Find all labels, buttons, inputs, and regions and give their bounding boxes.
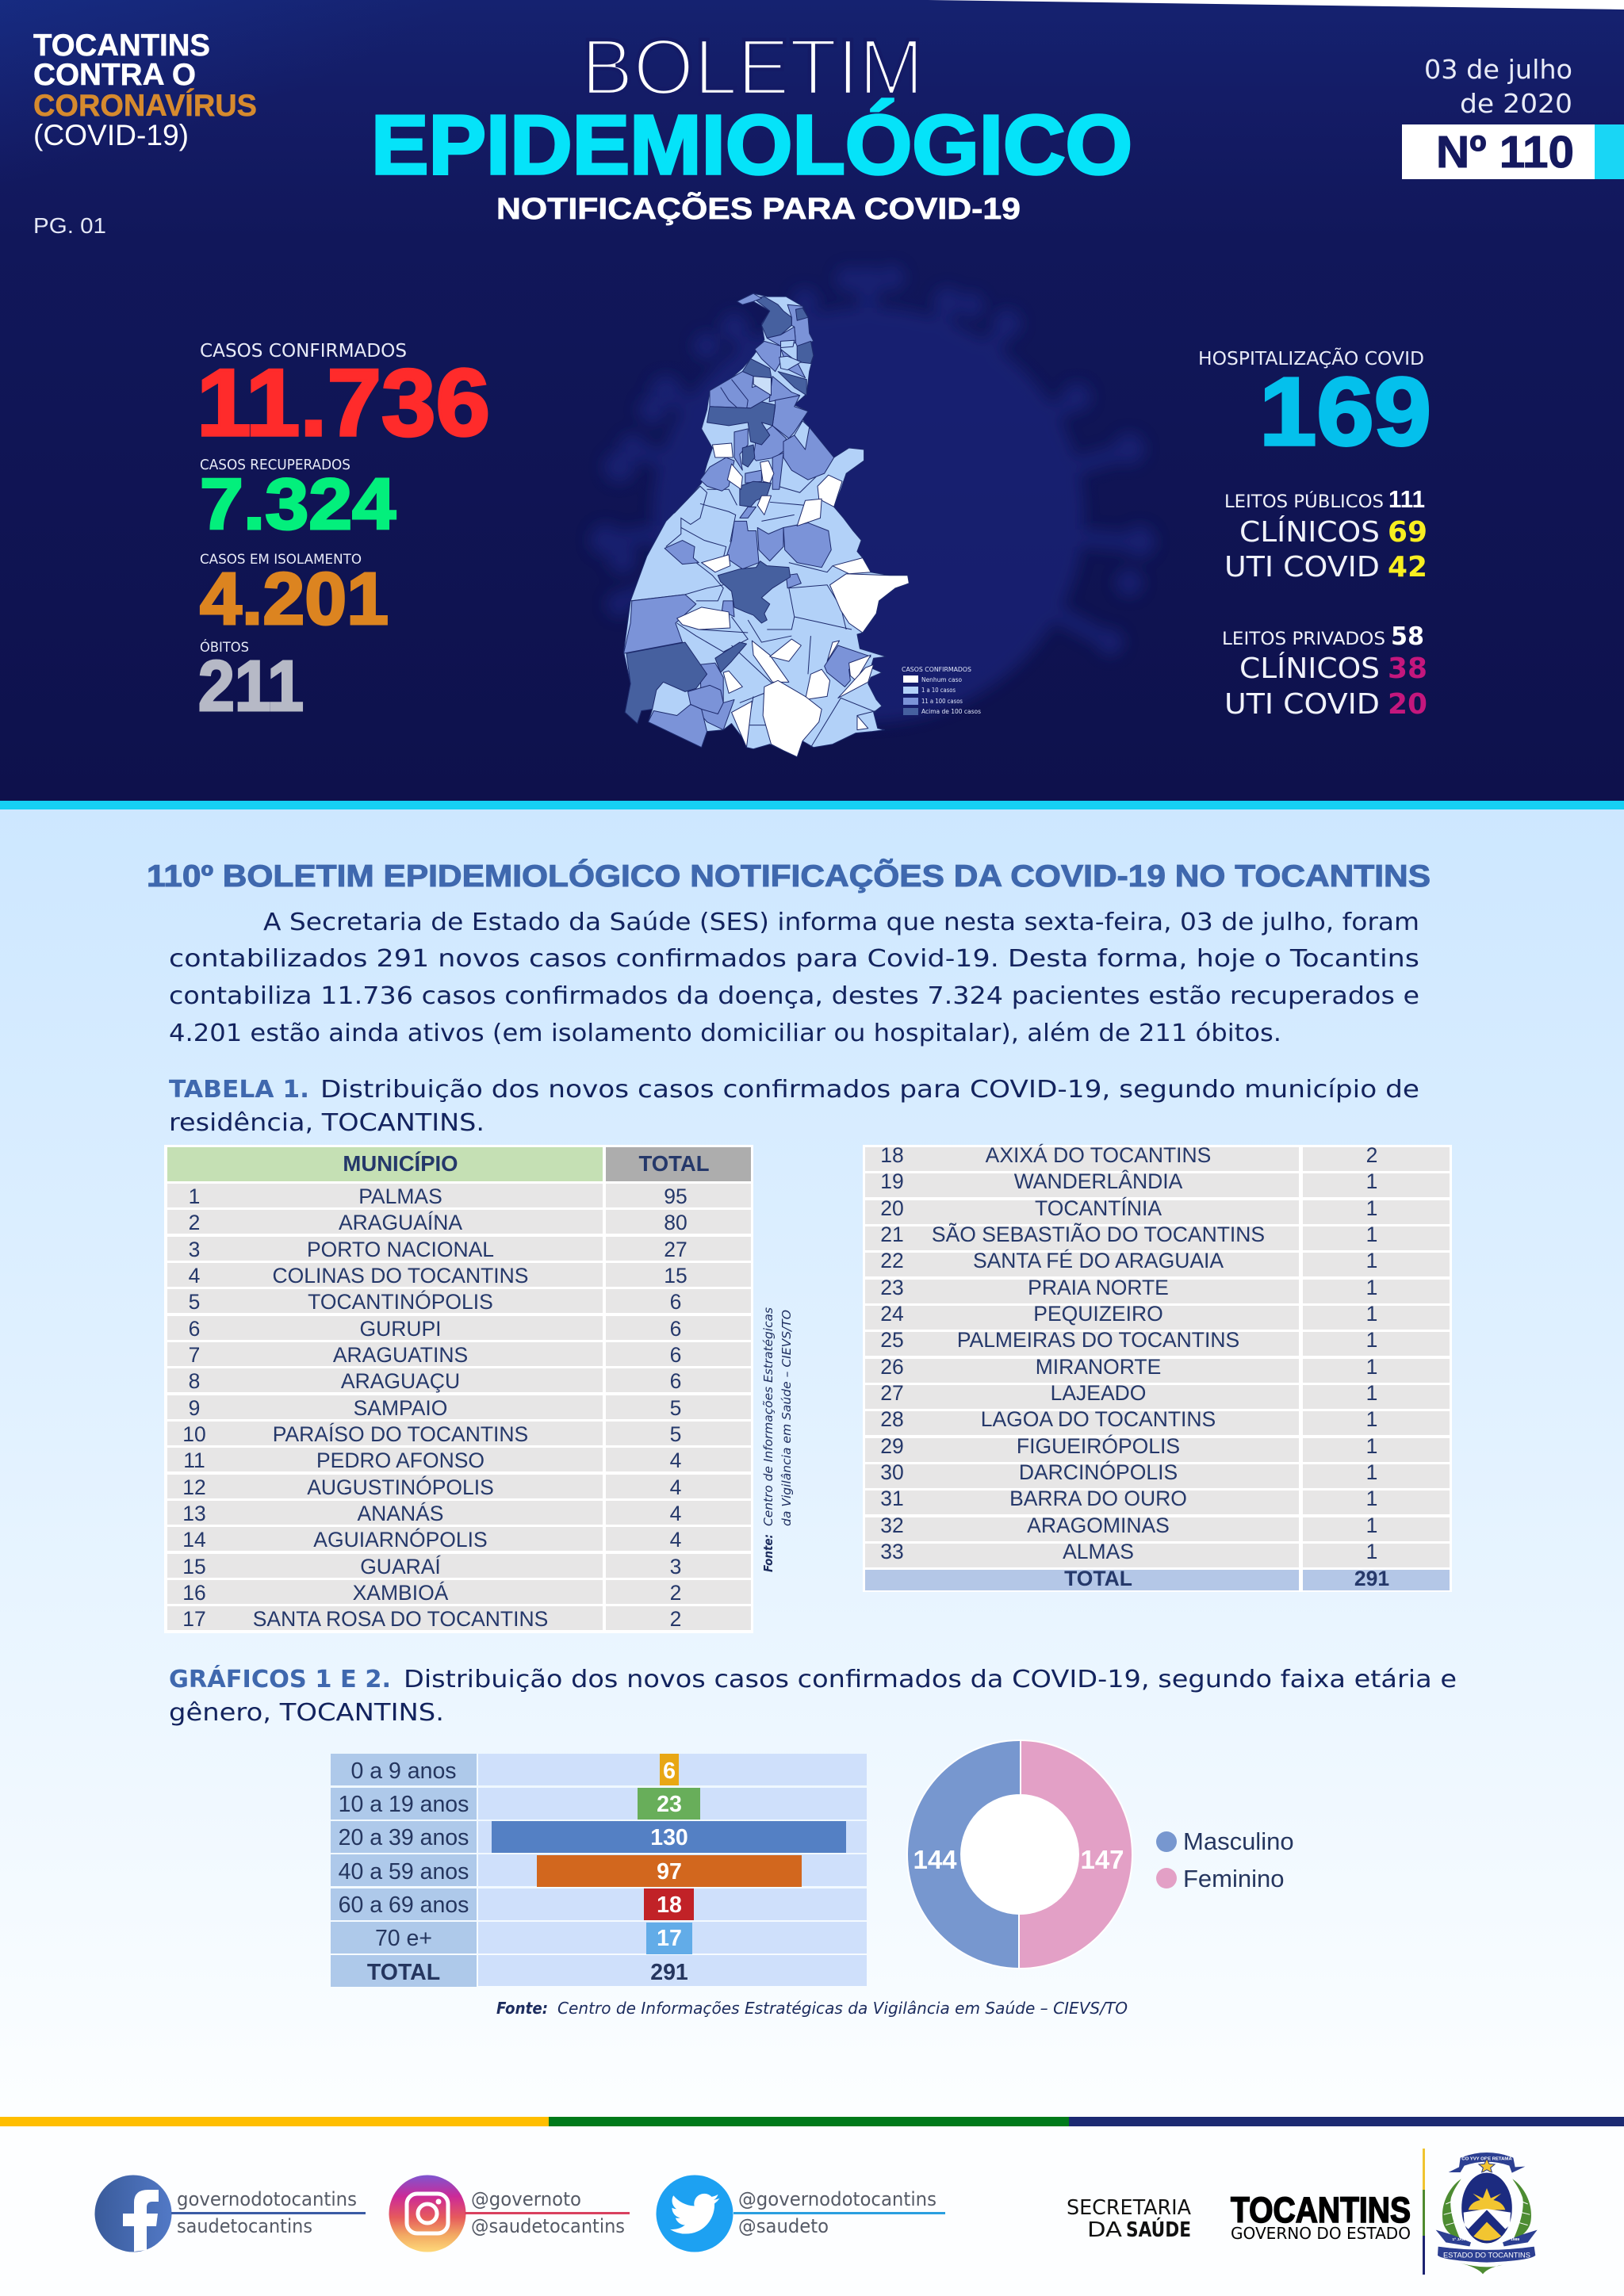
date: de 2020 (1460, 88, 1572, 119)
table: municípios 18 a 33: 20 (880, 1196, 904, 1220)
chart: cases by age group: 130 (650, 1825, 688, 1850)
heading: Tocantins contra o coronavírus: CORONAVÍRUS (33, 88, 257, 123)
table: municípios 1 a 17: 17 (182, 1607, 206, 1631)
table: municípios 18 a 33: 33 (880, 1540, 904, 1563)
table: municípios 18 a 33: PEQUIZEIRO (1033, 1302, 1163, 1326)
table: municípios 1 a 17: TOTAL (638, 1151, 710, 1176)
table: municípios 1 a 17: 4 (670, 1448, 681, 1472)
table 1 caption (169, 1076, 1419, 1137)
icon: state coat of arms: CO YVY ORE RETAMA (1461, 2157, 1512, 2162)
table: municípios 18 a 33: 24 (880, 1302, 904, 1326)
table: municípios 1 a 17: 2 (670, 1607, 681, 1631)
page number: PG. 01 (33, 213, 106, 238)
table: municípios 1 a 17: 6 (670, 1290, 681, 1314)
map of Tocantins by confirmed cases (623, 293, 909, 757)
map legend: CASOS CONFIRMADOS (902, 666, 971, 673)
social: instagram: @governoto (471, 2188, 581, 2210)
table: municípios 18 a 33: MIRANORTE (1036, 1355, 1161, 1379)
table: municípios 1 a 17: COLINAS DO TOCANTINS (273, 1264, 528, 1288)
chart: cases by age group: 97 (657, 1859, 682, 1885)
stat: leitos privados: LEITOS PRIVADOS (1222, 629, 1385, 649)
table: municípios 1 a 17 (164, 1145, 753, 1633)
table: municípios 1 a 17: 4 (189, 1264, 200, 1288)
stat: leitos públicos: 111 (1388, 485, 1425, 513)
intro paragraph: 4.201 estão ainda ativos (em isolamento domiciliar ou hospitalar), além de 211 óbitos. (169, 1020, 1281, 1047)
stat: leitos públicos: 69 (1388, 516, 1427, 549)
table: municípios 1 a 17: ANANÁS (358, 1502, 443, 1525)
chart: cases by age group: 23 (657, 1792, 682, 1817)
source note: Centro de Informações Estratégicas da Vigilância em Saúde – CIEVS/TO (557, 1999, 1128, 2018)
map legend: 11 a 100 casos (921, 698, 963, 705)
table: municípios 1 a 17: PEDRO AFONSO (316, 1448, 485, 1472)
table: municípios 18 a 33: 18 (880, 1143, 904, 1167)
table: municípios 18 a 33: 1 (1366, 1540, 1377, 1563)
heading: Tocantins contra o coronavírus: (COVID-19) (33, 119, 189, 151)
subtitle: NOTIFICAÇÕES PARA COVID-19 (496, 191, 1021, 226)
icon: coronavirus backdrop (590, 265, 1155, 723)
social: twitter: @saudeto (738, 2215, 829, 2237)
stat: leitos privados (1222, 622, 1427, 721)
table: municípios 18 a 33: WANDERLÂNDIA (1014, 1169, 1183, 1193)
chart: cases by age group: 17 (657, 1926, 682, 1951)
table: municípios 1 a 17: 3 (670, 1555, 681, 1578)
social: twitter (657, 2175, 945, 2252)
stat: casos em isolamento: CASOS EM ISOLAMENTO (200, 552, 362, 568)
table: municípios 18 a 33: 1 (1366, 1513, 1377, 1537)
table: municípios 18 a 33: 1 (1366, 1223, 1377, 1246)
stat: leitos privados: 38 (1388, 652, 1427, 685)
chart: cases by age group: 0 a 9 anos (350, 1758, 457, 1784)
table: municípios 1 a 17: SANTA ROSA DO TOCANTINS (253, 1607, 548, 1631)
stat: leitos públicos: CLÍNICOS (1239, 515, 1380, 549)
table: municípios 1 a 17: 4 (670, 1475, 681, 1499)
table: municípios 18 a 33: PALMEIRAS DO TOCANTINS (957, 1328, 1239, 1352)
section heading: 110º BOLETIM EPIDEMIOLÓGICO NOTIFICAÇÕES DA COVID-19 NO TOCANTINS (147, 859, 1431, 894)
table: municípios 18 a 33: 1 (1366, 1169, 1377, 1193)
table: municípios 18 a 33: FIGUEIRÓPOLIS (1017, 1434, 1180, 1458)
logo: Secretaria da Saúde: SAÚDE (1126, 2217, 1191, 2242)
heading: Tocantins contra o coronavírus: CONTRA O (33, 58, 196, 92)
charts caption (169, 1665, 1457, 1727)
edition badge: Nº 110 (1436, 127, 1574, 178)
logo: Tocantins governo do estado: TOCANTINS (1231, 2190, 1411, 2230)
table: municípios 18 a 33: 31 (880, 1487, 904, 1510)
chart: cases by age group: 60 a 69 anos (339, 1892, 469, 1918)
table: municípios 1 a 17: 6 (670, 1369, 681, 1393)
table: municípios 1 a 17: GUARAÍ (360, 1555, 441, 1578)
map legend: 1 a 10 casos (921, 687, 956, 694)
table: municípios 1 a 17: 15 (182, 1555, 206, 1578)
table: municípios 1 a 17: ARAGUAÇU (341, 1369, 460, 1393)
stat: leitos privados: CLÍNICOS (1239, 652, 1380, 685)
edition badge (1402, 124, 1624, 179)
table: municípios 18 a 33: ALMAS (1063, 1540, 1134, 1563)
table: municípios 18 a 33: LAGOA DO TOCANTINS (981, 1407, 1216, 1431)
stat: leitos públicos (1224, 485, 1427, 584)
chart: cases by age group: 10 a 19 anos (339, 1792, 469, 1817)
stat: casos confirmados: CASOS CONFIRMADOS (200, 341, 407, 362)
table: municípios 18 a 33: SANTA FÉ DO ARAGUAIA (973, 1249, 1224, 1272)
table: municípios 1 a 17: ARAGUATINS (333, 1343, 468, 1367)
social: instagram (389, 2175, 630, 2252)
panel: body background (0, 801, 1624, 2117)
stat: leitos privados: 20 (1388, 688, 1427, 721)
table: municípios 18 a 33: 21 (880, 1223, 904, 1246)
table: municípios 18 a 33: 25 (880, 1328, 904, 1352)
table: municípios 1 a 17: 6 (189, 1317, 200, 1341)
table: municípios 18 a 33: 1 (1366, 1196, 1377, 1220)
table: municípios 1 a 17: ARAGUAÍNA (339, 1211, 462, 1234)
table: municípios 1 a 17: 13 (182, 1502, 206, 1525)
logo: Tocantins governo do estado: GOVERNO DO ESTADO (1231, 2224, 1411, 2243)
chart: gender donut: 147 (1080, 1845, 1124, 1874)
table: municípios 1 a 17: 9 (189, 1396, 200, 1420)
table: municípios 1 a 17: PALMAS (358, 1184, 442, 1208)
table: municípios 1 a 17: TOCANTINÓPOLIS (308, 1290, 493, 1314)
table: municípios 18 a 33: 1 (1366, 1249, 1377, 1272)
heading: Tocantins contra o coronavírus: TOCANTINS (33, 29, 210, 63)
stat: leitos privados: 58 (1391, 622, 1424, 651)
panel: header background (0, 0, 1624, 801)
table: municípios 18 a 33: 2 (1366, 1143, 1377, 1167)
stat: hospitalização covid (1198, 347, 1431, 465)
table: municípios 18 a 33: 1 (1366, 1460, 1377, 1484)
table: municípios 18 a 33: 1 (1366, 1407, 1377, 1431)
charts caption: GRÁFICOS 1 E 2. (169, 1665, 391, 1693)
logo: Secretaria da Saúde: DA (1087, 2218, 1122, 2242)
table: municípios 18 a 33: 1 (1366, 1381, 1377, 1405)
table: municípios 1 a 17: MUNICÍPIO (343, 1151, 458, 1176)
table 1 caption: TABELA 1. (169, 1076, 309, 1104)
social: facebook: saudetocantins (177, 2215, 312, 2237)
intro paragraph: A Secretaria de Estado da Saúde (SES) informa que nesta sexta-feira, 03 de julho, foram (263, 909, 1419, 936)
table: municípios 18 a 33: 30 (880, 1460, 904, 1484)
title: Epidemiológico: EPIDEMIOLÓGICO (371, 98, 1132, 192)
table: municípios 1 a 17: SAMPAIO (354, 1396, 447, 1420)
stat: leitos públicos: UTI COVID (1224, 551, 1380, 584)
table: municípios 18 a 33: AXIXÁ DO TOCANTINS (986, 1143, 1211, 1167)
table 1 caption: residência, TOCANTINS. (169, 1109, 485, 1137)
table: municípios 1 a 17: 12 (182, 1475, 206, 1499)
table: municípios 1 a 17: 5 (670, 1396, 681, 1420)
table: municípios 1 a 17: 5 (189, 1290, 200, 1314)
table: municípios 1 a 17: PORTO NACIONAL (307, 1238, 494, 1261)
stat: óbitos: 211 (198, 647, 304, 726)
logo: Secretaria da Saúde: SECRETARIA (1067, 2196, 1191, 2220)
intro paragraph: contabilizados 291 novos casos confirmados para Covid-19. Desta forma, hoje o Tocantins (169, 945, 1419, 973)
table: municípios 18 a 33 (863, 1143, 1452, 1592)
table: municípios 18 a 33: ARAGOMINAS (1027, 1513, 1170, 1537)
table: municípios 18 a 33: 19 (880, 1169, 904, 1193)
stat: leitos privados: UTI COVID (1224, 688, 1380, 721)
intro paragraph: contabiliza 11.736 casos confirmados da doença, destes 7.324 pacientes estão recuperados e (169, 982, 1419, 1010)
table: municípios 18 a 33: 291 (1354, 1567, 1389, 1590)
table: municípios 1 a 17: 95 (664, 1184, 688, 1208)
table: municípios 1 a 17: AUGUSTINÓPOLIS (307, 1475, 494, 1499)
logo: Tocantins governo do estado (1231, 2190, 1411, 2243)
table: municípios 18 a 33: 1 (1366, 1328, 1377, 1352)
table: municípios 1 a 17: 14 (182, 1528, 206, 1552)
stat: hospitalização covid: HOSPITALIZAÇÃO COVID (1198, 347, 1424, 369)
table: municípios 1 a 17: 16 (182, 1581, 206, 1605)
stat: hospitalização covid: 169 (1259, 358, 1431, 465)
icon: state coat of arms: ESTADO DO TOCANTINS (1443, 2252, 1530, 2260)
table: municípios 18 a 33: 1 (1366, 1434, 1377, 1458)
map legend: Nenhum caso (921, 676, 962, 683)
chart: cases by age group: 18 (657, 1892, 682, 1918)
table: municípios 1 a 17: AGUIARNÓPOLIS (313, 1528, 488, 1552)
charts caption: Distribuição dos novos casos confirmados da COVID-19, segundo faixa etária e (404, 1666, 1457, 1693)
table: municípios 1 a 17: 15 (664, 1264, 688, 1288)
table: municípios 18 a 33: 23 (880, 1276, 904, 1299)
stat: leitos públicos: 42 (1388, 551, 1427, 584)
table: municípios 1 a 17: PARAÍSO DO TOCANTINS (273, 1422, 528, 1446)
table: municípios 18 a 33: 1 (1366, 1487, 1377, 1510)
table: municípios 1 a 17: 6 (670, 1317, 681, 1341)
stat: casos confirmados: 11.736 (197, 350, 490, 456)
stat: leitos públicos: LEITOS PÚBLICOS (1224, 492, 1384, 512)
table: municípios 1 a 17: XAMBIOÁ (353, 1581, 449, 1605)
chart: cases by age group (331, 1754, 867, 1987)
table: municípios 1 a 17: 2 (189, 1211, 200, 1234)
source note, vertical: da Vigilância em Saúde – CIEVS/TO (779, 1310, 794, 1526)
donut legend (1156, 1827, 1294, 1892)
donut legend: Feminino (1183, 1865, 1285, 1892)
stat: casos recuperados: 7.324 (200, 465, 396, 545)
table: municípios 1 a 17: 10 (182, 1422, 206, 1446)
chart: gender donut (907, 1740, 1132, 1969)
social: facebook: governodotocantins (177, 2188, 357, 2210)
title: Boletim: BOLETIM (581, 23, 924, 112)
source note, vertical: Centro de Informações Estratégicas (761, 1307, 776, 1526)
chart: cases by age group: 291 (650, 1960, 688, 1985)
icon: state coat of arms: 1989 (1511, 2237, 1519, 2242)
table: municípios 1 a 17: 6 (670, 1343, 681, 1367)
table: municípios 18 a 33: DARCINÓPOLIS (1019, 1460, 1178, 1484)
chart: cases by age group: TOTAL (367, 1960, 440, 1985)
source note: Fonte: (496, 1999, 548, 2018)
chart: gender donut: 144 (913, 1845, 957, 1874)
table: municípios 1 a 17: 7 (189, 1343, 200, 1367)
stat: casos em isolamento: 4.201 (200, 557, 389, 640)
table: municípios 18 a 33: BARRA DO OURO (1009, 1487, 1187, 1510)
table: municípios 18 a 33: SÃO SEBASTIÃO DO TOCANTINS (932, 1223, 1265, 1246)
table: municípios 18 a 33: 28 (880, 1407, 904, 1431)
chart: cases by age group: 70 e+ (375, 1926, 432, 1951)
charts caption: gênero, TOCANTINS. (169, 1699, 444, 1727)
map legend (902, 666, 981, 715)
panel: footer (0, 2117, 1624, 2296)
table: municípios 1 a 17: 27 (664, 1238, 688, 1261)
source note, vertical (761, 1307, 794, 1572)
table: municípios 18 a 33: 26 (880, 1355, 904, 1379)
map legend: Acima de 100 casos (921, 708, 981, 715)
social: twitter: @governodotocantins (738, 2188, 936, 2210)
chart: cases by age group: 40 a 59 anos (339, 1859, 469, 1885)
table: municípios 18 a 33: 1 (1366, 1276, 1377, 1299)
table: municípios 18 a 33: 22 (880, 1249, 904, 1272)
chart: cases by age group: 6 (663, 1758, 676, 1784)
table: municípios 18 a 33: 1 (1366, 1302, 1377, 1326)
logo divider (1423, 2149, 1425, 2275)
donut legend: Masculino (1183, 1827, 1294, 1855)
table: municípios 18 a 33: 1 (1366, 1355, 1377, 1379)
social: facebook (95, 2175, 366, 2252)
icon: state coat of arms: 1º JAN (1452, 2237, 1465, 2242)
table: municípios 1 a 17: 3 (189, 1238, 200, 1261)
table: municípios 18 a 33: 27 (880, 1381, 904, 1405)
table: municípios 1 a 17: 11 (183, 1448, 205, 1472)
table: municípios 18 a 33: PRAIA NORTE (1028, 1276, 1169, 1299)
table: municípios 18 a 33: 29 (880, 1434, 904, 1458)
date (1424, 54, 1572, 119)
table 1 caption: Distribuição dos novos casos confirmados para COVID-19, segundo município de (320, 1076, 1419, 1104)
table: municípios 1 a 17: 2 (670, 1581, 681, 1605)
table: municípios 18 a 33: 32 (880, 1513, 904, 1537)
logo: Secretaria da Saúde (1067, 2196, 1191, 2242)
table: municípios 1 a 17: 1 (189, 1184, 200, 1208)
intro paragraph (169, 909, 1419, 1047)
table: municípios 1 a 17: 4 (670, 1502, 681, 1525)
stat: casos recuperados: CASOS RECUPERADOS (200, 457, 350, 473)
table: municípios 18 a 33: TOCANTÍNIA (1035, 1196, 1162, 1220)
table: municípios 1 a 17: GURUPI (359, 1317, 442, 1341)
stat: óbitos: ÓBITOS (200, 638, 249, 656)
table: municípios 1 a 17: 5 (670, 1422, 681, 1446)
table: municípios 18 a 33: TOTAL (1064, 1567, 1132, 1590)
icon: state coat of arms (1436, 2152, 1538, 2274)
heading: Tocantins contra o coronavírus (33, 29, 257, 151)
date: 03 de julho (1424, 54, 1572, 85)
table: municípios 1 a 17: 4 (670, 1528, 681, 1552)
table: municípios 18 a 33: LAJEADO (1051, 1381, 1146, 1405)
source note, vertical: Fonte: (761, 1534, 776, 1572)
table: municípios 1 a 17: 80 (664, 1211, 688, 1234)
table: municípios 1 a 17: 8 (189, 1369, 200, 1393)
social: instagram: @saudetocantins (471, 2215, 625, 2237)
chart: cases by age group: 20 a 39 anos (339, 1825, 469, 1850)
